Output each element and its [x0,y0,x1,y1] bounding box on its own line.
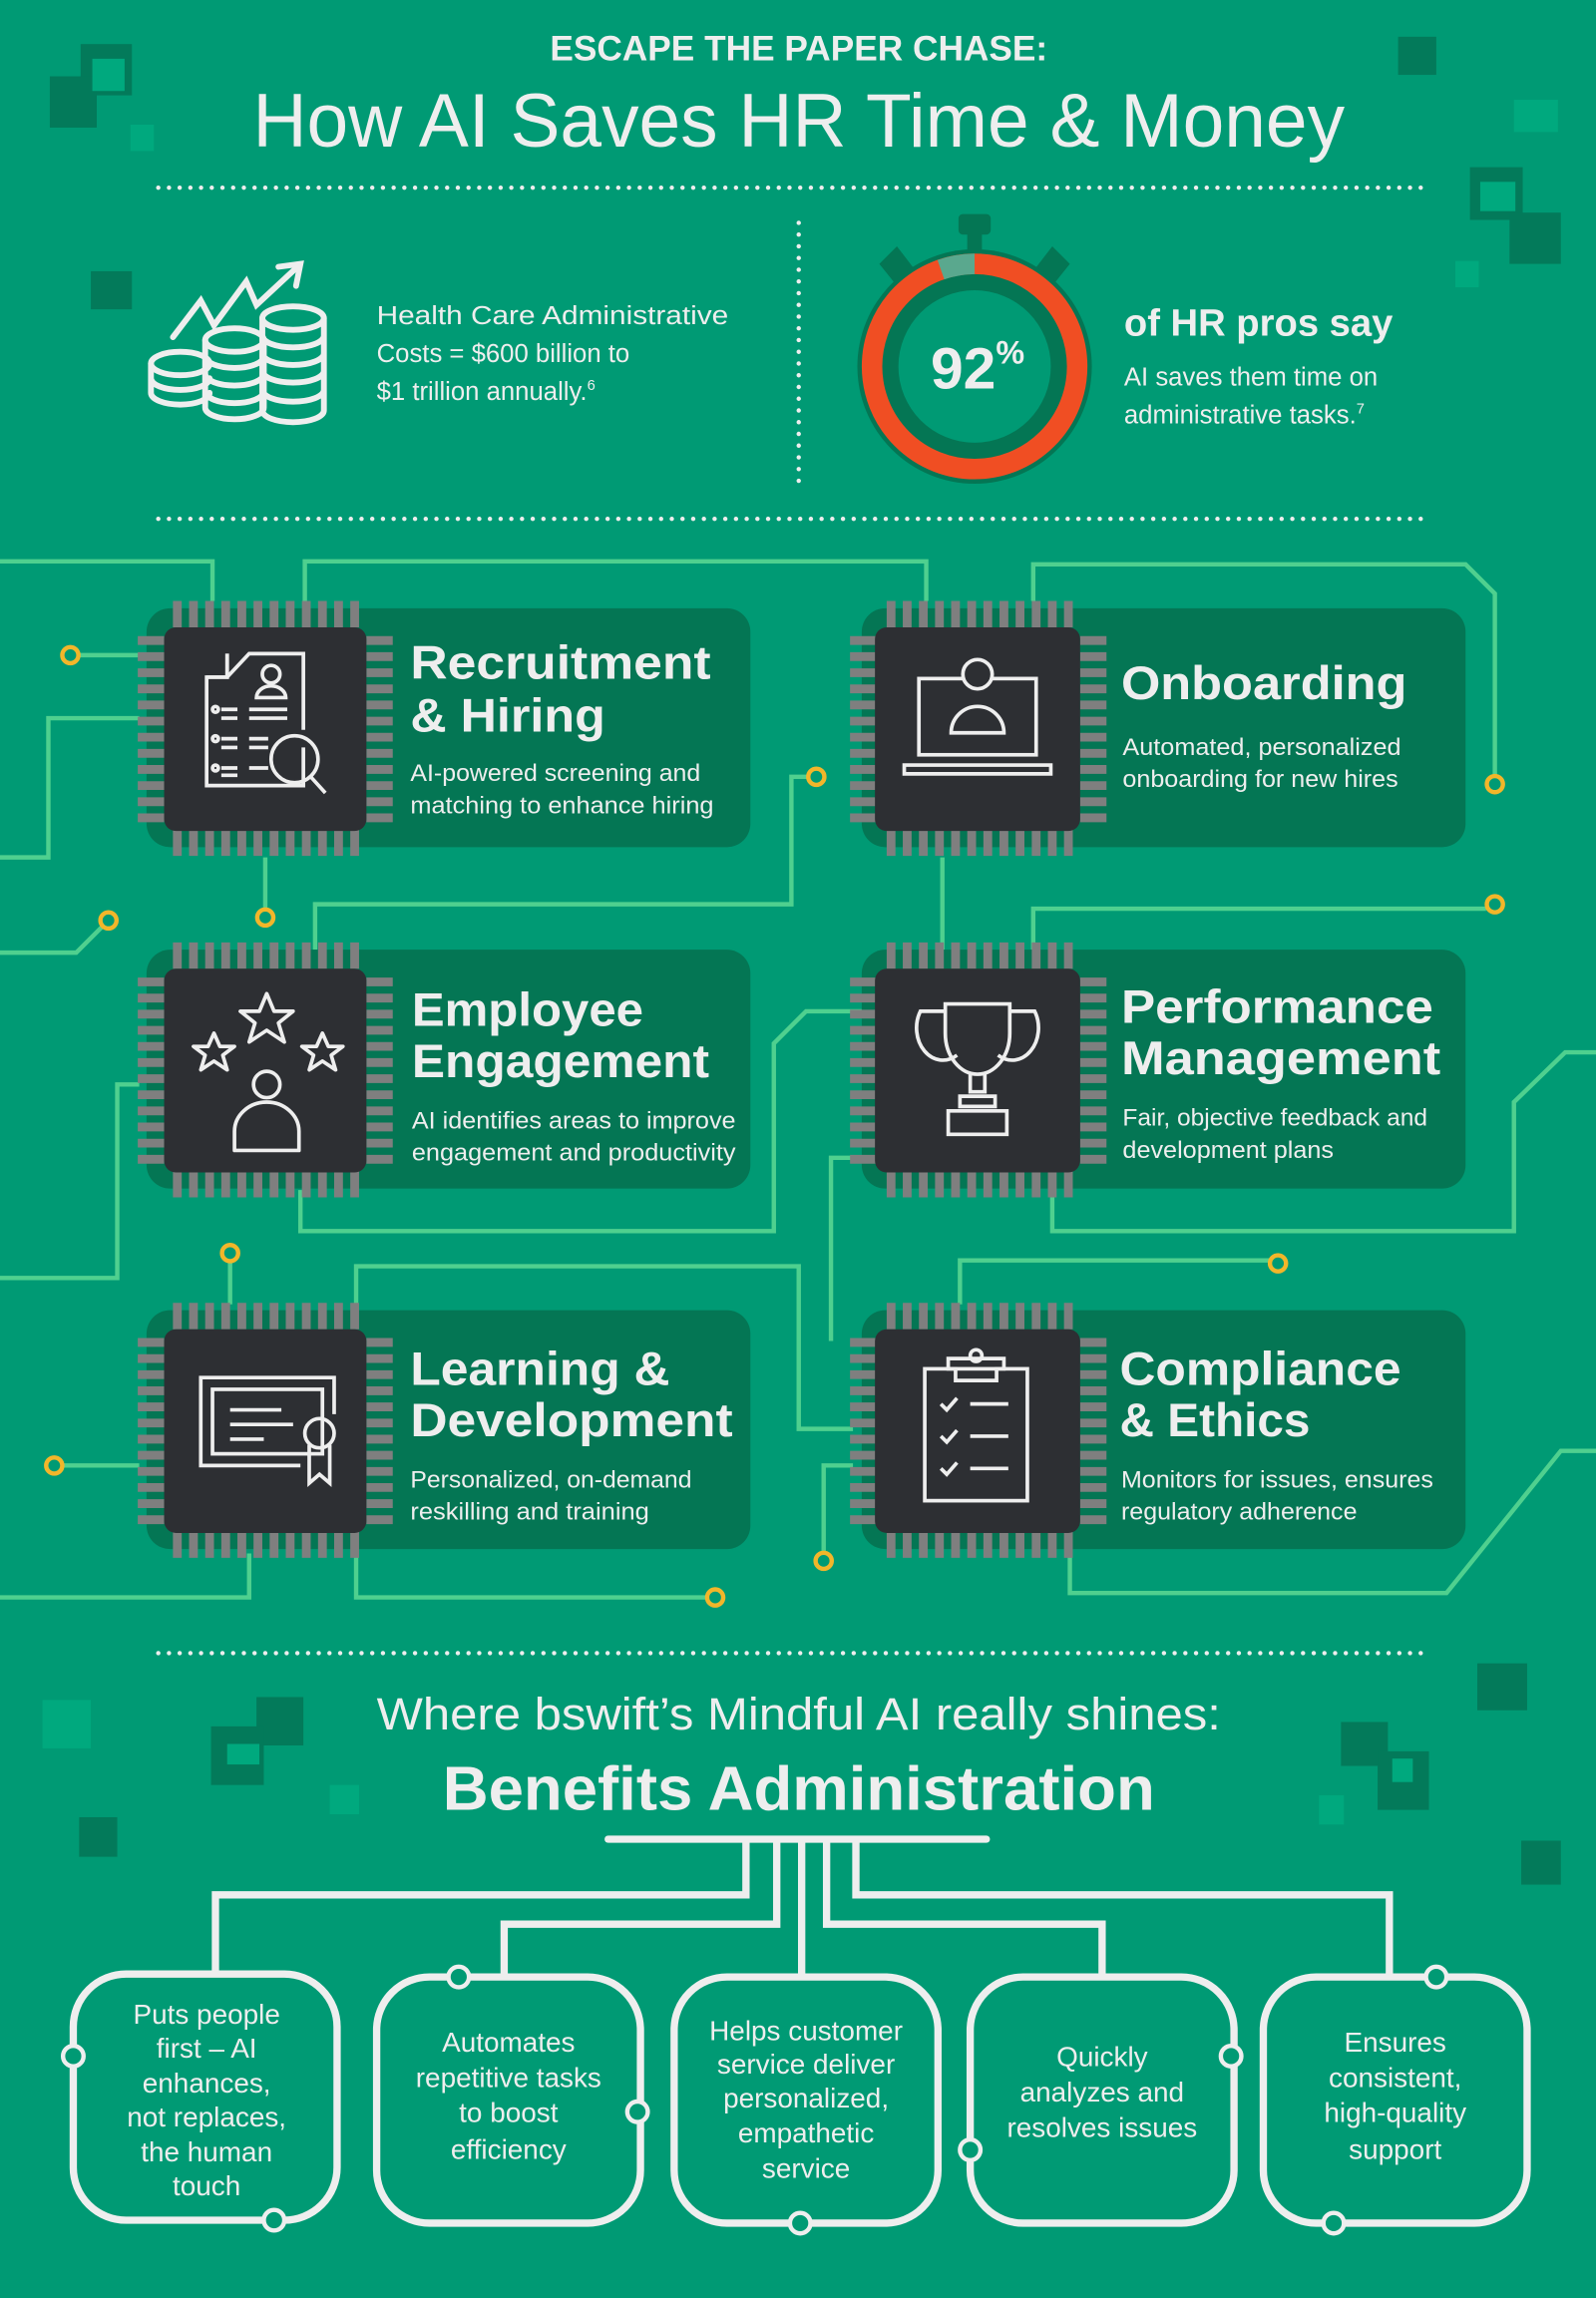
icon: trophy [917,1004,1038,1134]
benefit texts: repetitive tasks [416,2062,601,2093]
decorative squares [43,37,1561,1885]
benefit texts: empathetic [738,2117,874,2148]
benefit texts: analyzes and [1020,2077,1184,2107]
heading: Benefits Administration: Benefits Administration [443,1755,1155,1824]
icon: stopwatch 92%: % [996,334,1024,370]
stat: health care costs: Costs = $600 billion to [377,340,629,368]
card: Compliance & Ethics: regulatory adherence [1121,1499,1358,1526]
benefit texts: service [762,2152,850,2183]
card: Performance Management: Fair, objective feedback and [1122,1104,1427,1131]
benefit texts: resolves issues [1006,2111,1197,2142]
card: Learning & Development [147,1311,750,1549]
stat: HR pros: 7 [1357,401,1365,417]
title: How AI Saves HR Time & Money [252,79,1346,164]
card: Employee Engagement: Engagement [412,1034,709,1087]
stat: health care costs: 6 [588,378,596,394]
benefit texts: touch [173,2170,240,2201]
card: Recruitment & Hiring [147,608,750,847]
benefit texts: Quickly [1056,2042,1148,2073]
card: Recruitment & Hiring: AI-powered screening and [410,760,700,787]
card: Onboarding: Automated, personalized [1122,734,1401,761]
card: Learning & Development: Development [410,1393,733,1446]
icon: stopwatch 92% [858,214,1092,484]
card: Performance Management: Performance [1121,980,1433,1033]
card: Compliance & Ethics: & Ethics [1119,1393,1310,1446]
card: Employee Engagement: Employee [412,983,643,1036]
benefit texts: Puts people [133,1999,280,2030]
card: Learning & Development: Personalized, on-demand [410,1466,691,1493]
card: Recruitment & Hiring: Recruitment [410,635,711,688]
benefit texts: consistent, [1329,2062,1461,2093]
stat: health care costs: $1 trillion annually. [377,378,588,406]
icon: clipboard checklist [925,1349,1027,1501]
circuit traces [0,562,1596,1598]
benefit texts: not replaces, [127,2102,286,2132]
card: Performance Management [862,950,1465,1189]
card: Learning & Development: Learning & [410,1342,669,1395]
card: Onboarding: Onboarding [1121,656,1406,709]
stat: HR pros: of HR pros say [1124,302,1394,345]
card: Performance Management: Management [1121,1031,1441,1084]
card: Recruitment & Hiring: matching to enhance hiring [410,793,714,820]
icon: coins with rising arrow [151,264,324,422]
icon: laptop with person [905,659,1050,774]
icon: certificate [200,1377,334,1483]
subheading: Where bswift’s Mindful AI really shines: [377,1689,1221,1739]
benefit texts: first – AI [157,2033,257,2064]
benefit texts: personalized, [723,2083,889,2113]
card: Performance Management: development plans [1122,1137,1334,1164]
card: Onboarding: onboarding for new hires [1122,766,1398,793]
benefit texts: enhances, [143,2068,271,2099]
stat: HR pros: administrative tasks. [1124,402,1357,430]
card: Compliance & Ethics [862,1311,1465,1549]
stat: health care costs: Health Care Administrative [377,302,728,330]
card: Employee Engagement: AI identifies areas to improve [412,1107,736,1134]
circuit nodes [46,647,1503,1606]
benefit boxes [73,1974,1527,2223]
stat: HR pros [1124,302,1394,430]
benefit texts [127,1999,1466,2201]
benefit texts: support [1349,2133,1441,2164]
card: Compliance & Ethics: Monitors for issues, ensures [1121,1466,1433,1493]
icon: resume with magnifier [206,653,325,793]
benefit texts: Automates [442,2027,576,2058]
tree connector [215,1839,1390,1974]
benefit texts: Helps customer [709,2015,903,2046]
benefit texts: service deliver [717,2049,895,2080]
title kicker: ESCAPE THE PAPER CHASE: [550,29,1047,68]
card: Onboarding [862,608,1465,847]
icon: stopwatch 92%: 92 [931,336,996,401]
card: Employee Engagement [147,950,750,1189]
card: Learning & Development: reskilling and training [410,1499,649,1526]
benefit texts: Ensures [1345,2027,1446,2058]
benefit texts: to boost [459,2098,559,2128]
card: Recruitment & Hiring: & Hiring [410,688,605,741]
benefit texts: efficiency [451,2133,567,2164]
icon: stars and person [194,993,343,1150]
stat: HR pros: AI saves them time on [1124,364,1378,392]
card: Compliance & Ethics: Compliance [1119,1342,1401,1395]
benefit texts: high-quality [1324,2098,1466,2128]
stat: health care costs [377,302,728,406]
benefit texts: the human [141,2136,272,2167]
card: Employee Engagement: engagement and productivity [412,1140,736,1167]
